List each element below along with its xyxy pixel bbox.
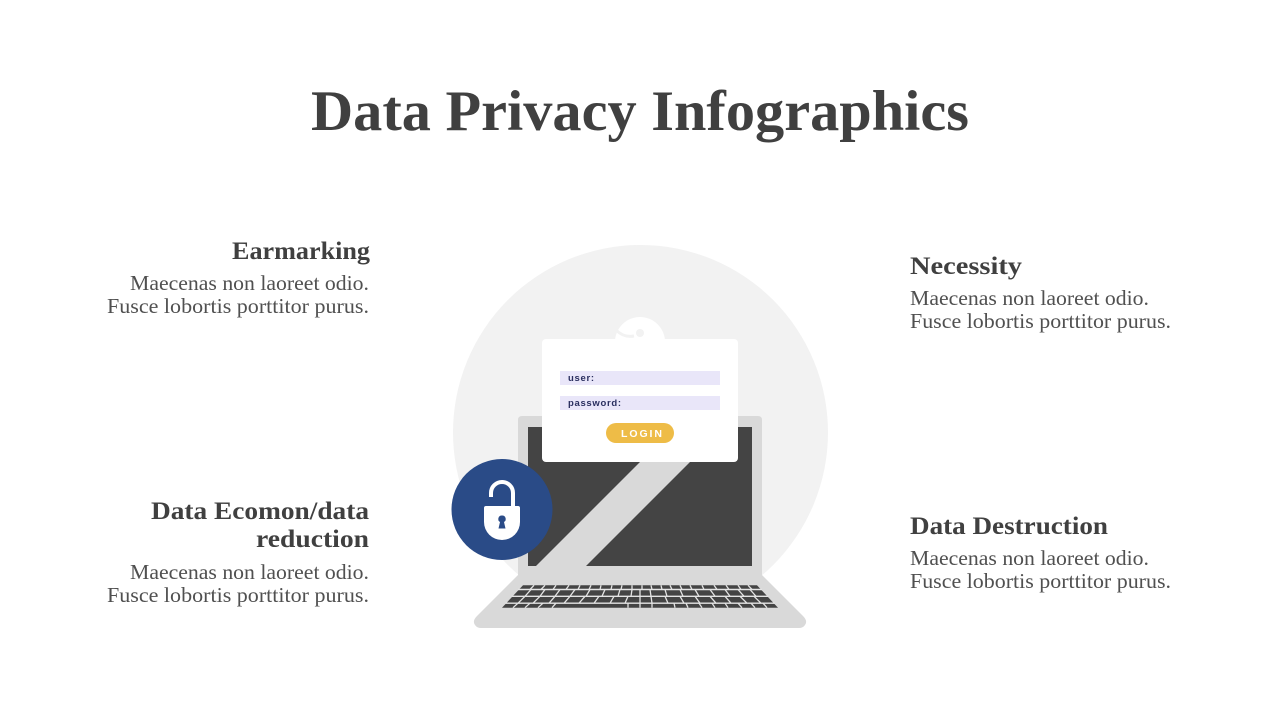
title: Data Privacy Infographics xyxy=(311,80,969,143)
login button xyxy=(606,423,674,443)
body: Necessity xyxy=(910,286,1171,333)
login card xyxy=(542,339,738,462)
body: Data Destruction xyxy=(910,546,1171,593)
laptop base xyxy=(474,573,806,628)
body: Data Destruction: Maecenas non laoreet odio. xyxy=(910,546,1149,570)
illustration: laptop login xyxy=(452,245,828,628)
heading: Earmarking: Earmarking xyxy=(232,236,370,265)
body: Earmarking: Maecenas non laoreet odio. xyxy=(130,271,369,295)
body: Data Ecomon/data reduction: Maecenas non laoreet odio. xyxy=(130,560,369,584)
heading: Necessity: Necessity xyxy=(910,251,1022,280)
body: Earmarking: Fusce lobortis porttitor purus. xyxy=(107,294,369,318)
heading: Data Ecomon/data reduction: reduction xyxy=(256,524,369,553)
password field: password: xyxy=(568,398,621,409)
body: Data Destruction: Fusce lobortis porttitor purus. xyxy=(910,569,1171,593)
heading: Data Ecomon/data reduction: Data Ecomon/data xyxy=(151,496,369,525)
background circle xyxy=(453,245,828,620)
body: Necessity: Maecenas non laoreet odio. xyxy=(910,286,1149,310)
laptop lid xyxy=(518,416,762,575)
text block: Earmarking xyxy=(107,236,370,318)
body: Data Ecomon/data reduction: Fusce lobortis porttitor purus. xyxy=(107,583,369,607)
icon: open padlock badge xyxy=(452,459,552,560)
screen diagonal reflection xyxy=(536,462,690,566)
text block: Necessity xyxy=(910,251,1171,333)
body: Necessity: Fusce lobortis porttitor purus. xyxy=(910,309,1171,333)
login hanger bump xyxy=(615,317,665,367)
laptop screen xyxy=(528,427,752,566)
user field: user: xyxy=(568,373,594,384)
keyboard xyxy=(502,585,778,608)
user field xyxy=(560,371,720,385)
body: Data Ecomon/data reduction xyxy=(107,560,369,607)
login button: LOGIN xyxy=(621,428,662,440)
password field xyxy=(560,396,720,410)
heading: Data Ecomon/data reduction xyxy=(151,496,369,553)
text block: Data Ecomon/data reduction xyxy=(107,496,369,607)
body: Earmarking xyxy=(107,271,369,318)
text block: Data Destruction xyxy=(910,511,1171,593)
heading: Data Destruction: Data Destruction xyxy=(910,511,1108,540)
